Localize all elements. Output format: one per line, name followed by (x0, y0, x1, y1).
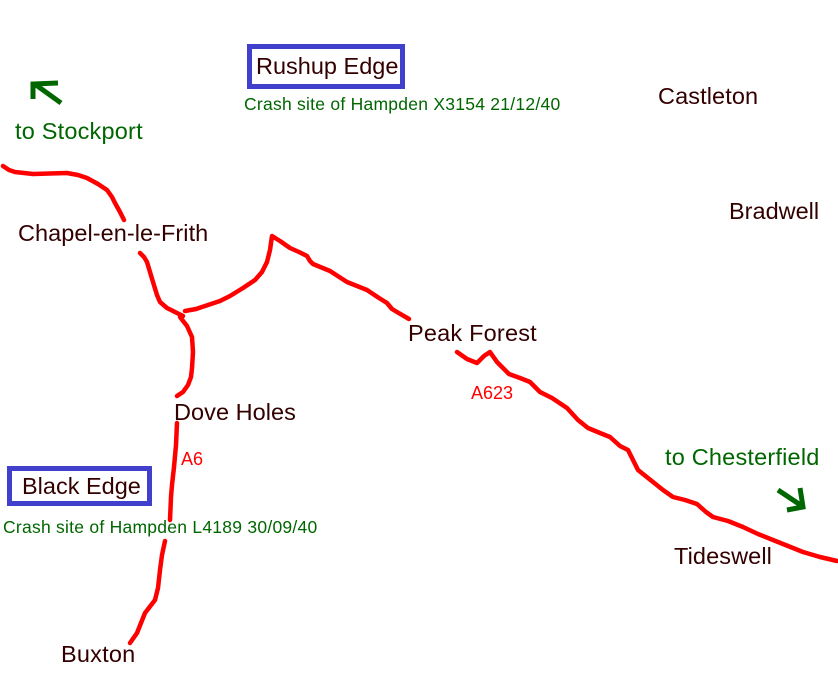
label: Buxton: Buxton (61, 641, 135, 667)
label: A623: A623 (471, 383, 513, 403)
label: Chapel-en-le-Frith: Chapel-en-le-Frith (18, 220, 208, 246)
label: A6: A6 (181, 449, 203, 469)
label: to Stockport: to Stockport (15, 118, 143, 144)
label: Peak Forest: Peak Forest (408, 320, 537, 346)
text: Hampden X3154 crash site: Crash site of Hampden X3154 21/12/40 (244, 94, 560, 114)
text: Hampden L4189 crash site: Crash site of Hampden L4189 30/09/40 (3, 517, 317, 537)
label: Bradwell: Bradwell (729, 198, 819, 224)
label: Dove Holes: Dove Holes (174, 399, 296, 425)
callout: Black Edge: Black Edge (22, 473, 141, 499)
label: to Chesterfield: to Chesterfield (665, 444, 820, 470)
callout: Black Edge (7, 466, 152, 506)
callout: Rushup Edge: Rushup Edge (256, 53, 398, 79)
label: Tideswell: Tideswell (674, 543, 772, 569)
label: Castleton: Castleton (658, 83, 758, 109)
callout: Rushup Edge (247, 44, 405, 89)
